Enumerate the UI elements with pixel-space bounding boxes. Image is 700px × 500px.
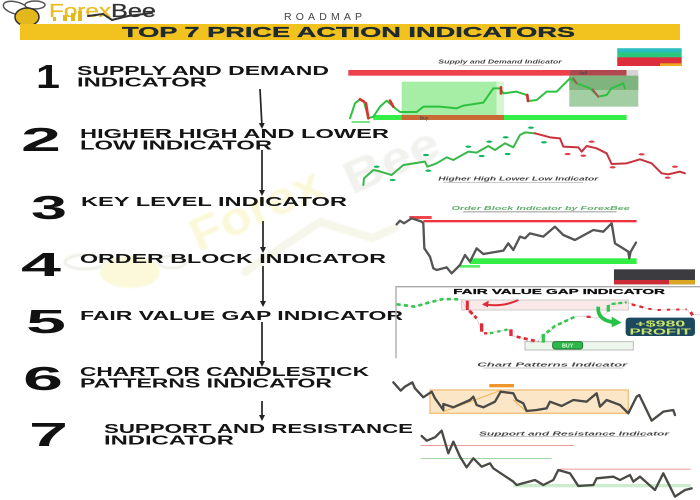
watermark: Bee — [335, 116, 447, 204]
chart: fair value gap: BUY — [562, 343, 574, 349]
title banner — [20, 24, 680, 41]
chart: higher high lower low: Higher High Lower Low Indicator — [438, 177, 600, 183]
item 2: higher high and lower low — [21, 121, 390, 158]
chart: fair value gap: PROFIT — [629, 327, 691, 336]
item 4: order block — [21, 246, 387, 283]
item 1: supply and demand: SUPPLY AND DEMAND — [77, 63, 329, 78]
chart: fair value gap: FAIR VALUE GAP INDICATOR — [453, 287, 666, 296]
item 1: supply and demand: INDICATOR — [77, 74, 208, 90]
item 7: support and resistance: INDICATOR — [104, 432, 235, 448]
item 6: chart or candlestick patterns: 6 — [23, 360, 63, 397]
logo: Bee — [111, 1, 156, 21]
item 6: chart or candlestick patterns — [23, 360, 370, 397]
item 3: key level: 3 — [31, 189, 67, 226]
item 6: chart or candlestick patterns: CHART OR CANDLESTICK — [80, 364, 370, 379]
chart: supply and demand: Buy — [420, 115, 429, 120]
chart: order block — [397, 206, 637, 273]
item 2: higher high and lower low: 2 — [21, 121, 61, 158]
item 3: key level — [31, 189, 348, 226]
chart: supply and demand: Supply and Demand Indicator — [438, 60, 563, 66]
logo — [2, 0, 156, 26]
watermark: Forex — [181, 156, 330, 261]
chart: chart patterns: Chart Patterns Indicator — [477, 362, 629, 368]
item 1: supply and demand — [36, 58, 329, 95]
item 7: support and resistance — [29, 416, 413, 453]
item 2: higher high and lower low: LOW INDICATOR — [80, 138, 273, 152]
chart: higher high lower low — [363, 126, 685, 185]
chart: support and resistance: Support and Resistance Indicator — [479, 431, 671, 437]
item 3: key level: KEY LEVEL INDICATOR — [81, 194, 348, 209]
chart: chart patterns — [393, 362, 675, 421]
chart: fair value gap — [396, 269, 700, 358]
item 4: order block: ORDER BLOCK INDICATOR — [80, 251, 387, 266]
chart: supply and demand: Sell — [579, 71, 587, 76]
chart: supply and demand — [348, 48, 682, 123]
flow arrows — [260, 89, 263, 419]
item 7: support and resistance: 7 — [29, 416, 68, 453]
roadmap label: ROADMAP — [284, 11, 362, 23]
item 6: chart or candlestick patterns: PATTERNS INDICATOR — [80, 376, 333, 390]
item 5: fair value gap: FAIR VALUE GAP INDICATOR — [80, 308, 404, 323]
watermark — [65, 116, 447, 288]
item 5: fair value gap: 5 — [26, 303, 66, 340]
item 7: support and resistance: SUPPORT AND RESISTANCE — [104, 421, 413, 436]
item 1: supply and demand: 1 — [36, 58, 60, 95]
title banner: TOP 7 PRICE ACTION INDICATORS — [122, 25, 576, 41]
item 4: order block: 4 — [21, 246, 62, 283]
chart: fair value gap: +$980 — [635, 319, 687, 328]
item 5: fair value gap — [26, 303, 404, 340]
logo: Forex — [49, 1, 111, 21]
chart: order block: Order Block Indicator by ForexBee — [451, 206, 630, 212]
chart: support and resistance — [421, 431, 692, 497]
item 2: higher high and lower low: HIGHER HIGH AND LOWER — [80, 126, 390, 141]
